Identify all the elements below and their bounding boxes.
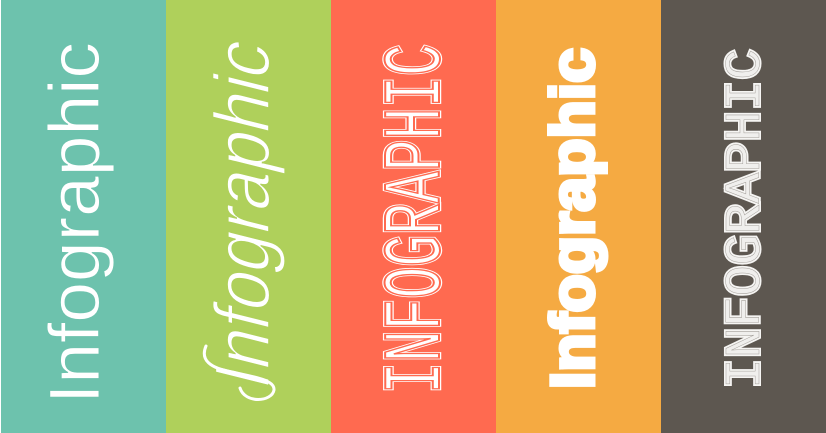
panel: charcoal, distressed slab caps: INFOGRAPHIC: [718, 49, 775, 389]
panel: charcoal, distressed slab caps: [661, 0, 826, 433]
panel: teal, thin sans: [1, 0, 166, 433]
panel: charcoal, distressed slab caps: INFOGRAPHIC: [718, 49, 775, 389]
panel: teal, thin sans: Infographic: [36, 42, 115, 404]
panel: green, script: Infographic: [198, 29, 286, 396]
panel: green, script: [166, 0, 331, 433]
swash on the capital I: [204, 346, 274, 400]
panel: orange, heavy sans: [496, 0, 661, 433]
panel: red, outlined varsity caps: [331, 0, 496, 433]
panel: orange, heavy sans: Infographic: [538, 48, 606, 389]
